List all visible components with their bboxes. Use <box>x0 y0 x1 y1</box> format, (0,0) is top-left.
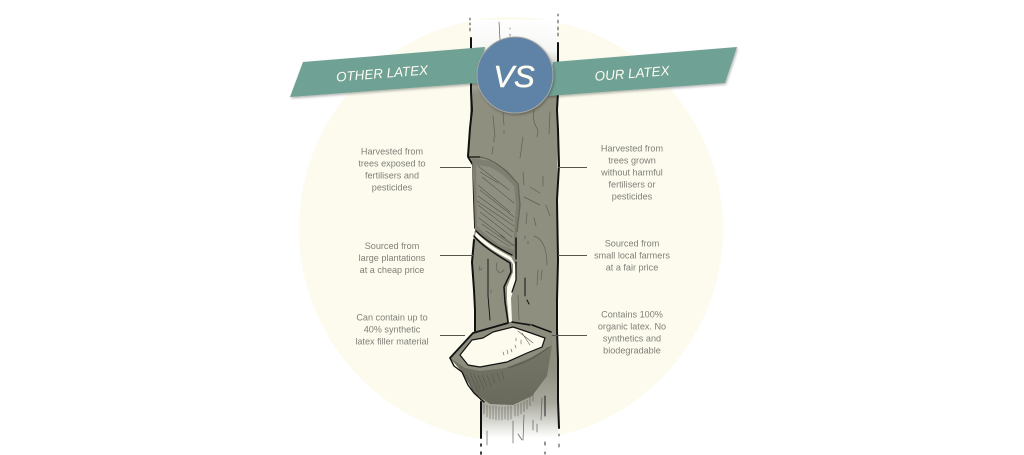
text: other latex, sourcing: at a cheap price <box>360 265 424 275</box>
text: our latex, organic: Contains 100% <box>601 310 663 320</box>
text: other latex, sourcing: large plantations <box>359 253 426 263</box>
text: our latex, fertilisers: Harvested from <box>601 144 663 154</box>
tree trunk <box>468 20 558 455</box>
bark marks <box>479 22 550 454</box>
text: other latex, filler: latex filler material <box>355 336 429 346</box>
latex surface <box>460 327 545 367</box>
latex drip channel <box>474 231 516 322</box>
leader lines <box>440 168 587 336</box>
text: other latex, fertilisers <box>358 146 426 192</box>
text: our latex, sourcing <box>594 238 670 272</box>
text: other latex, filler <box>355 312 429 346</box>
text: other latex, fertilisers: pesticides <box>372 182 413 192</box>
text: other latex, filler: Can contain up to <box>356 312 428 322</box>
text: other latex, filler: 40% synthetic <box>364 324 421 334</box>
banner: other latex: OTHER LATEX <box>336 62 430 85</box>
text: other latex, fertilisers: fertilisers and <box>365 170 419 180</box>
text: our latex, fertilisers <box>600 144 663 202</box>
text: our latex, sourcing: small local farmers <box>594 250 670 260</box>
text: our latex, fertilisers: fertilisers or <box>608 180 656 190</box>
text: our latex, organic: organic latex. No <box>598 322 666 332</box>
shadow drips under cup <box>484 393 533 420</box>
background circle <box>299 17 723 441</box>
trunk outlines <box>468 14 559 454</box>
text: our latex, sourcing: Sourced from <box>605 238 659 248</box>
text: our latex, organic: synthetics and <box>603 334 661 344</box>
tapping cut: hatched panel <box>469 157 520 259</box>
text: our latex, organic <box>598 310 666 356</box>
text: our latex, sourcing: at a fair price <box>606 262 658 272</box>
banner: our latex: OUR LATEX <box>594 63 671 84</box>
illustration: rubber tree with tapping cup <box>450 14 559 455</box>
text: other latex, sourcing <box>359 241 426 275</box>
text: our latex, fertilisers: pesticides <box>612 192 653 202</box>
banner: other latex <box>290 47 485 97</box>
text: other latex, fertilisers: Harvested from <box>361 146 423 156</box>
VS badge <box>477 37 553 113</box>
text: other latex, fertilisers: trees exposed to <box>358 158 426 168</box>
text: our latex, fertilisers: trees grown <box>608 156 656 166</box>
text: other latex, sourcing: Sourced from <box>365 241 419 251</box>
VS badge: VS <box>493 59 535 94</box>
banner: our latex <box>548 47 737 96</box>
text: our latex, fertilisers: without harmful <box>600 168 663 178</box>
latex collecting cup <box>450 322 552 405</box>
text: our latex, organic: biodegradable <box>603 346 661 356</box>
